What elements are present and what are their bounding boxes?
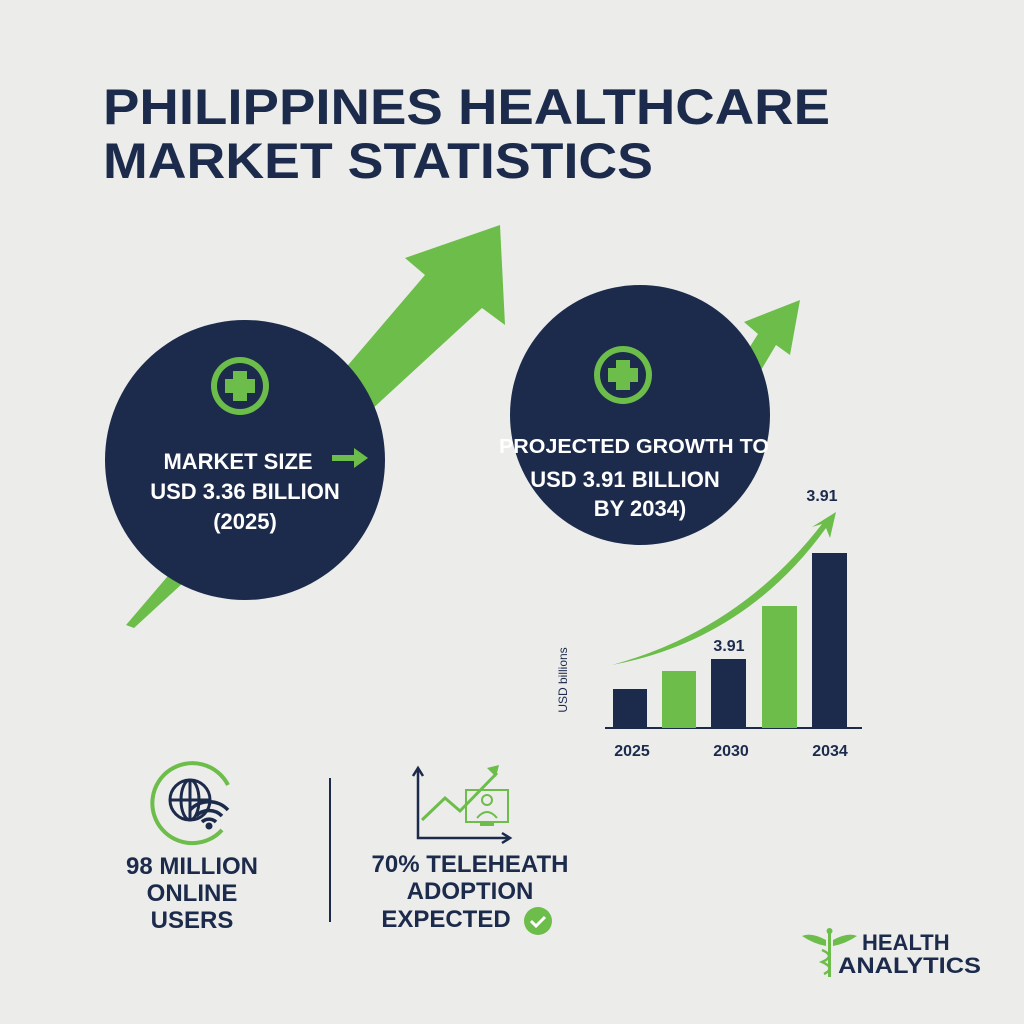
bar chart: 3.91 — [806, 488, 838, 505]
text: market size: MARKET SIZE — [163, 449, 313, 474]
icon: globe wifi — [152, 763, 228, 843]
text: online users: 98 MILLION — [126, 853, 258, 880]
text: online users: ONLINE — [147, 880, 237, 907]
arrow: trend curve — [612, 512, 836, 665]
bar chart: 2030 — [713, 743, 749, 760]
title — [103, 79, 830, 189]
text: online users — [126, 853, 258, 934]
text: market size — [150, 449, 340, 534]
arrow: small right — [332, 448, 368, 468]
title: MARKET STATISTICS — [103, 133, 653, 189]
text: projected growth: BY 2034) — [594, 496, 686, 521]
text: telehealth adoption — [372, 851, 568, 933]
text: telehealth adoption: 70% TELEHEATH — [372, 851, 568, 878]
text: market size: (2025) — [213, 509, 277, 534]
panel: market size circle — [105, 320, 385, 600]
bar chart: 2034 — [812, 743, 848, 760]
icon: medical cross 2 — [594, 346, 652, 404]
panel: projected growth circle — [499, 285, 770, 545]
bar chart — [556, 488, 862, 760]
text: telehealth adoption: EXPECTED — [381, 906, 511, 933]
text: projected growth: USD 3.91 BILLION — [530, 467, 720, 492]
icon: medical cross — [211, 357, 269, 415]
arrow: small growth — [730, 300, 800, 392]
bar chart: 2025 — [614, 743, 650, 760]
text: online users: USERS — [151, 907, 233, 934]
logo: health analytics: ANALYTICS — [838, 953, 981, 978]
divider — [329, 778, 331, 922]
title: PHILIPPINES HEALTHCARE — [103, 79, 830, 135]
bar chart: 3.91 — [713, 638, 745, 655]
text: telehealth adoption: ADOPTION — [407, 878, 533, 905]
text: projected growth: PROJECTED GROWTH TO — [499, 436, 769, 458]
text: projected growth — [499, 436, 769, 521]
icon: check — [524, 907, 552, 935]
bar chart: USD billions — [556, 647, 570, 713]
logo: health analytics: HEALTH — [862, 930, 950, 955]
icon: telehealth chart — [413, 765, 510, 843]
logo: health analytics — [802, 928, 981, 978]
text: market size: USD 3.36 BILLION — [150, 479, 340, 504]
arrow: big growth — [126, 225, 505, 628]
